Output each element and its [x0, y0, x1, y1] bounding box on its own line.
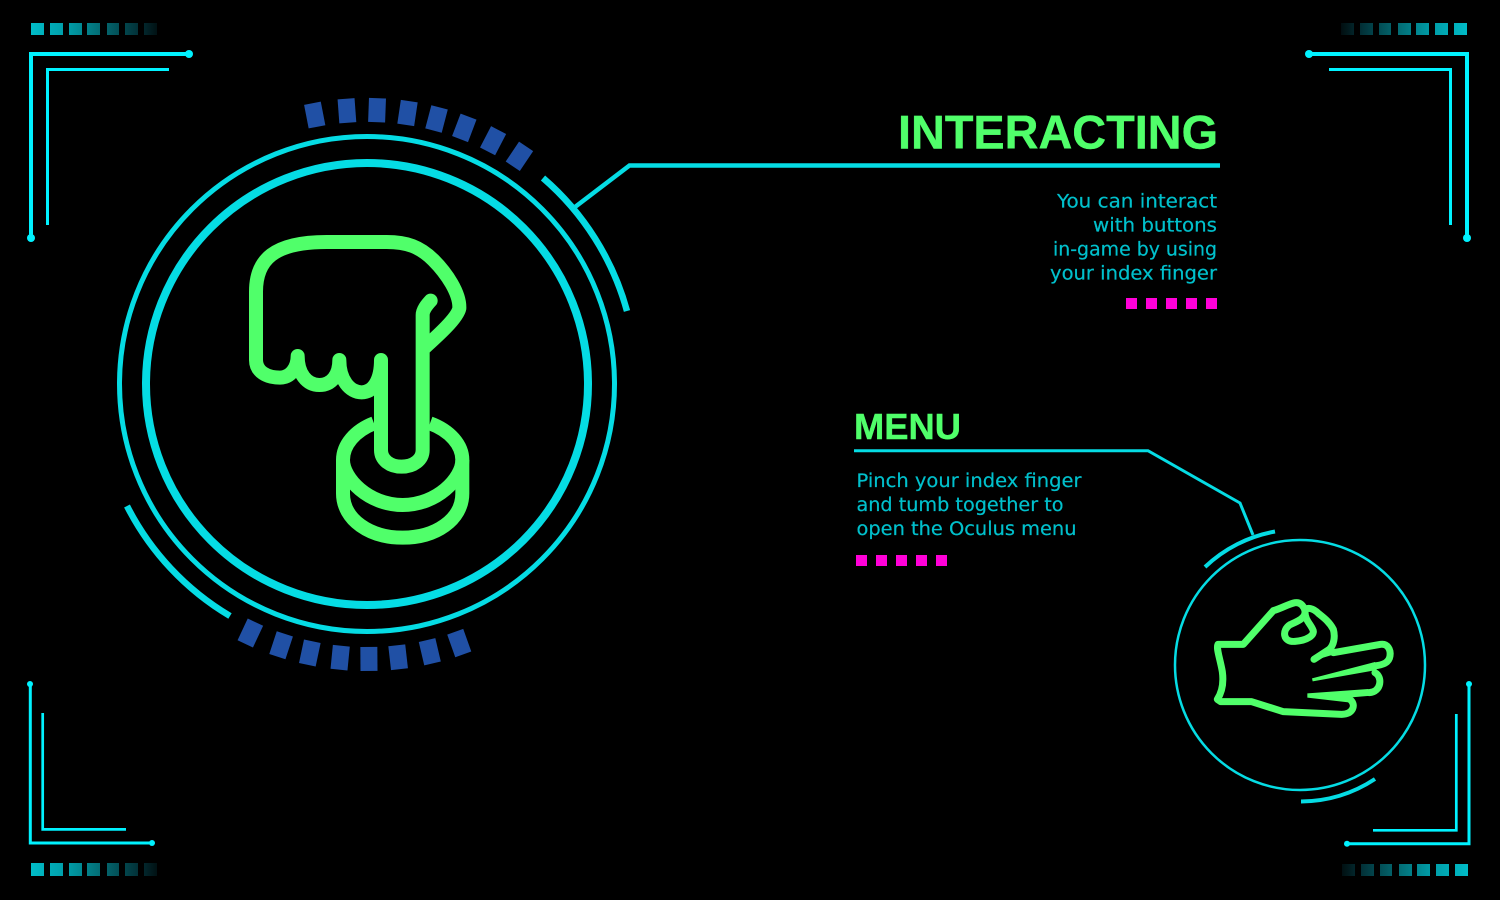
- magenta squares: interacting: [1126, 298, 1217, 309]
- text block: menu description: open the Oculus menu: [856, 519, 1076, 540]
- blue tick marks: bottom: [238, 619, 471, 671]
- text block: menu description: [856, 471, 1082, 540]
- text block: interacting description: [1050, 192, 1217, 284]
- text block: interacting description: your index finger: [1050, 264, 1217, 284]
- heading: interacting: INTERACTING: [898, 106, 1218, 160]
- corner frame: top right: [1305, 50, 1471, 242]
- fading squares: bottom left: [31, 863, 157, 876]
- leader line: interacting: [575, 166, 1220, 207]
- large dial with rings: [120, 136, 627, 632]
- heading: menu: MENU: [854, 406, 961, 447]
- corner frame: bottom right: [1344, 681, 1472, 847]
- icon: pinching hand: [1217, 603, 1390, 714]
- fading squares: bottom right: [1342, 864, 1468, 876]
- text block: interacting description: in-game by using: [1053, 240, 1217, 260]
- corner frame: bottom left: [27, 681, 155, 846]
- text block: menu description: Pinch your index finger: [856, 471, 1082, 492]
- text block: interacting description: with buttons: [1093, 216, 1217, 236]
- leader line: menu: [854, 451, 1253, 535]
- small dial with rings: [1175, 532, 1425, 802]
- corner frame: top left: [27, 50, 193, 242]
- fading squares: top left: [31, 23, 157, 35]
- blue tick marks: top: [304, 98, 533, 171]
- text block: interacting description: You can interact: [1056, 192, 1217, 212]
- text block: menu description: and tumb together to: [856, 495, 1064, 516]
- icon: finger pressing button: [256, 242, 462, 538]
- magenta squares: menu: [856, 555, 947, 566]
- fading squares: top right: [1341, 23, 1467, 35]
